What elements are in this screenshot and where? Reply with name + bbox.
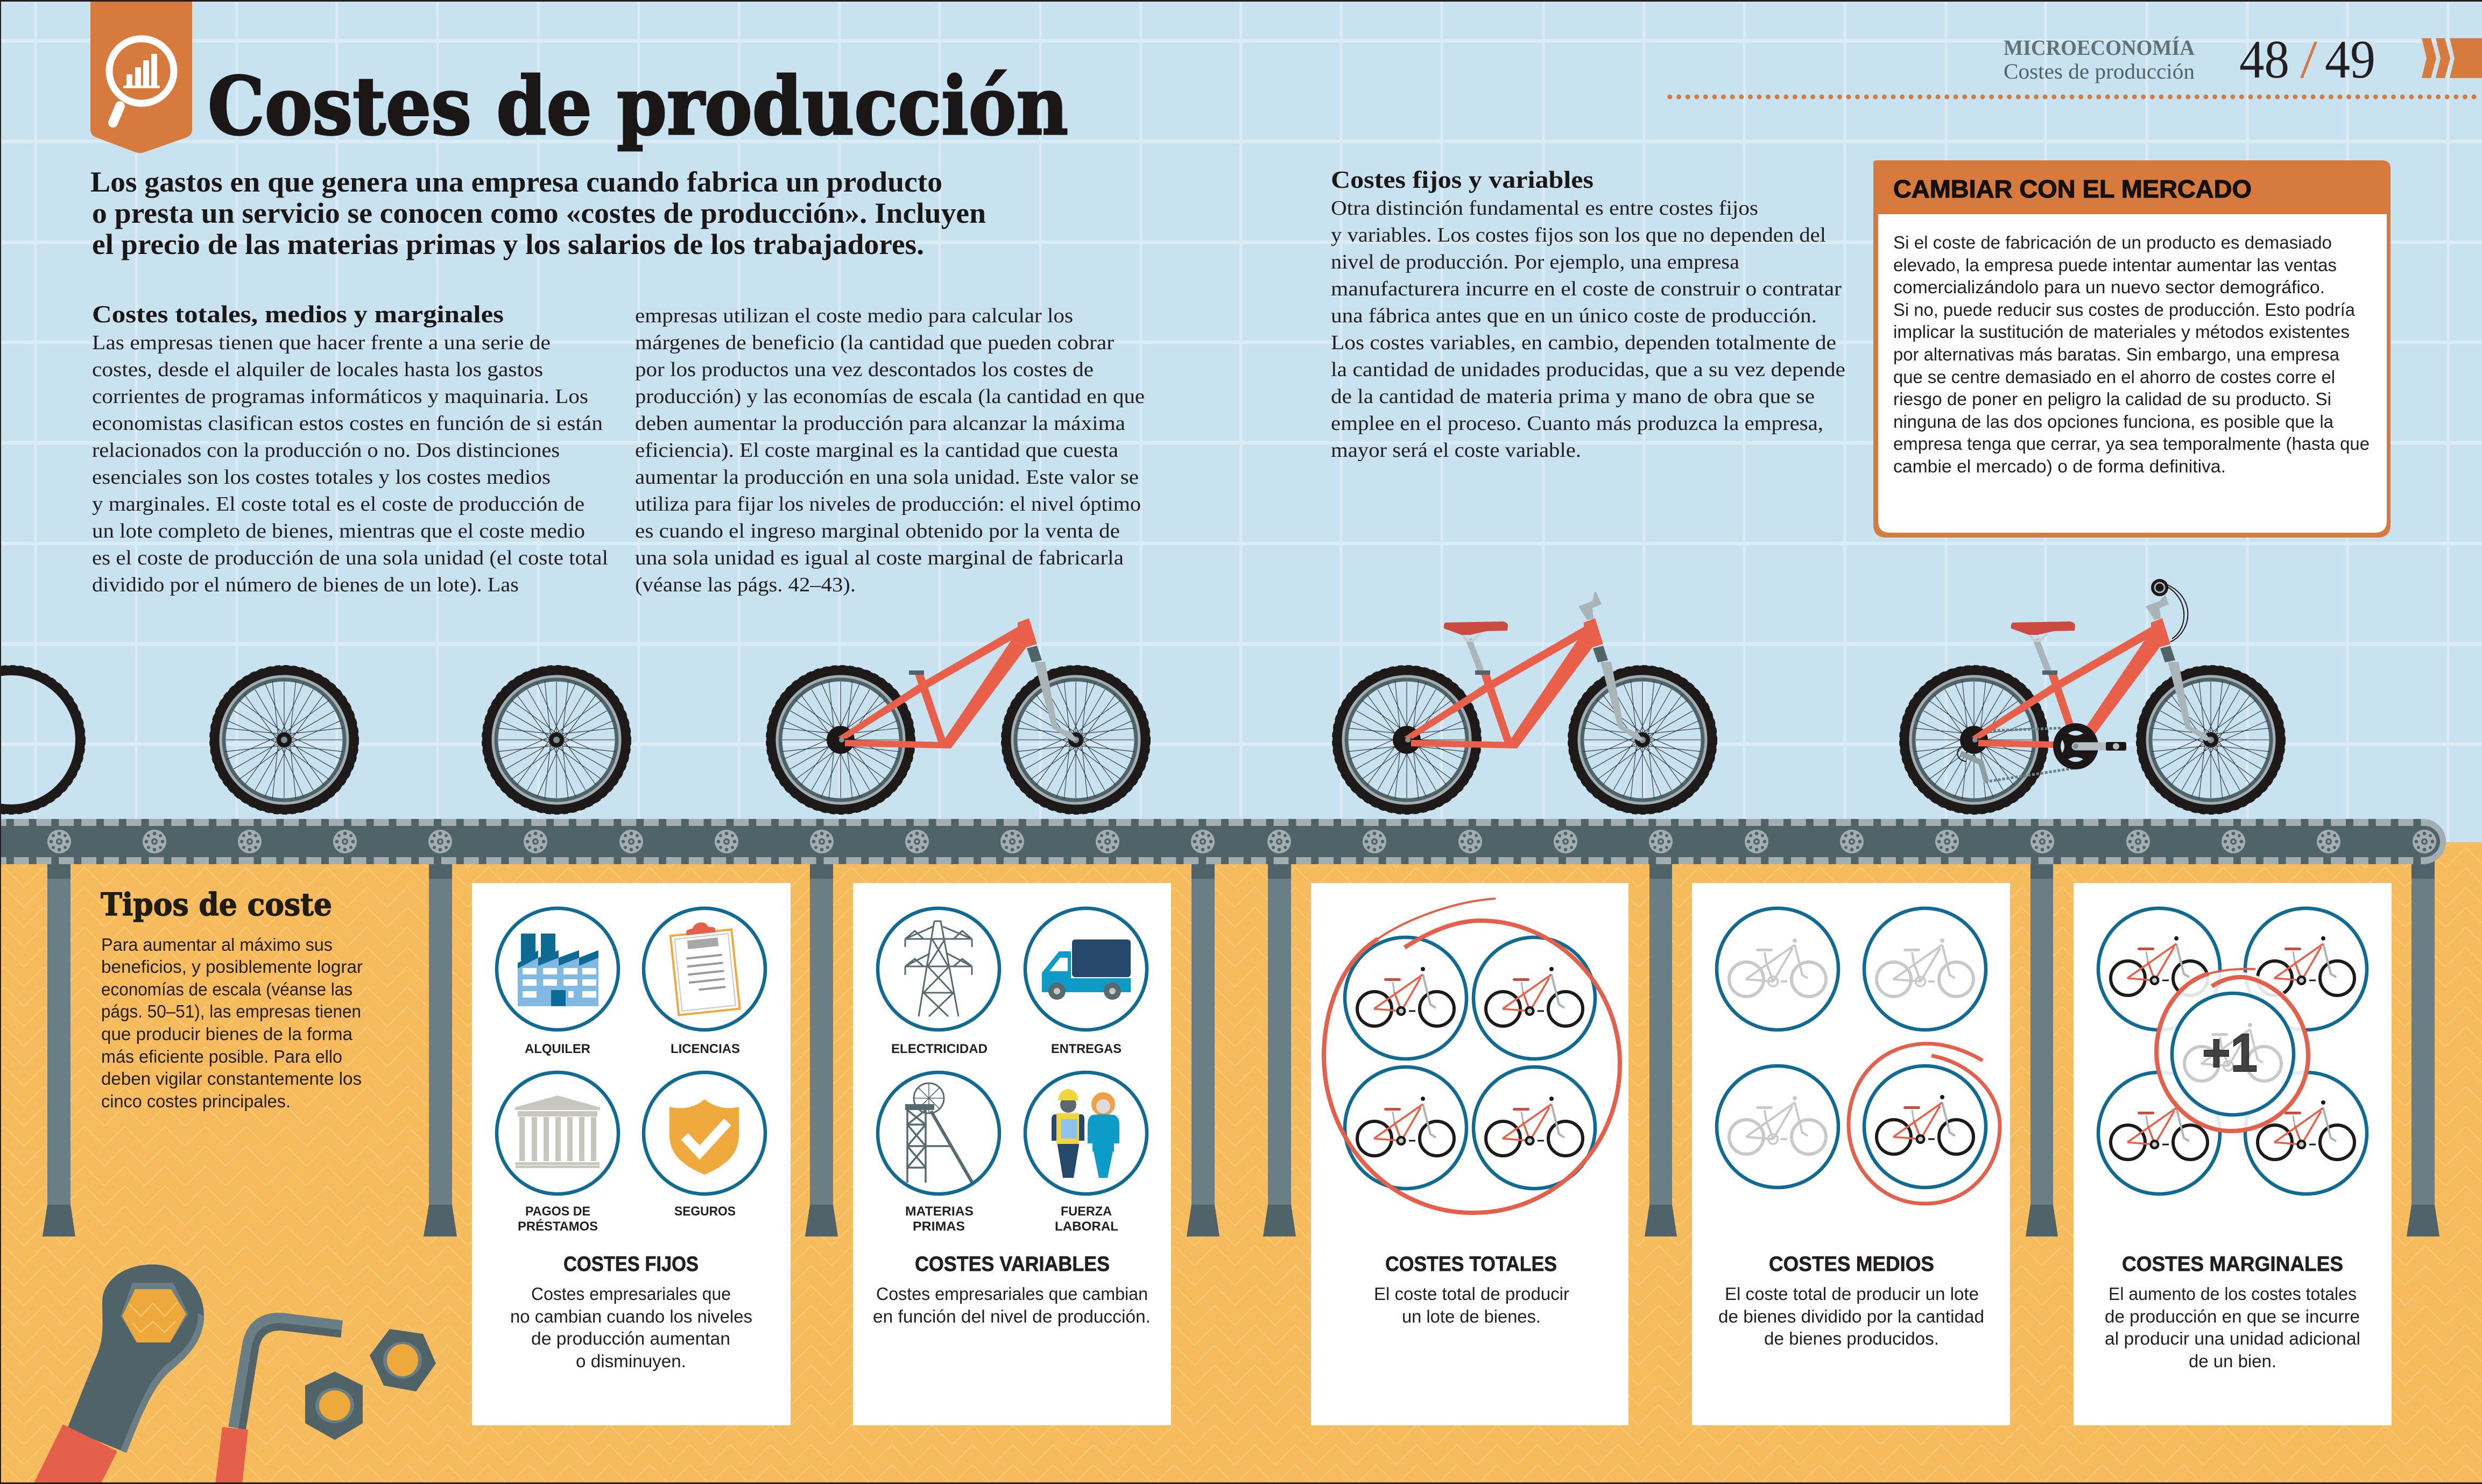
additional unit circled with +1: +1 bbox=[2202, 1023, 2258, 1083]
panel: costes fijos bbox=[472, 883, 791, 1425]
body text column 1: economistas clasifican estos costes en función de si están bbox=[92, 412, 603, 435]
body text column 2: una sola unidad es igual al coste marginal de fabricarla bbox=[635, 547, 1124, 569]
body text column 3 bbox=[1331, 197, 1845, 462]
icon labels: ELECTRICIDAD bbox=[891, 1042, 988, 1056]
icon labels: PAGOS DE bbox=[525, 1204, 590, 1219]
callout text: que se centre demasiado en el ahorro de costes corre el bbox=[1893, 367, 2335, 387]
card text bbox=[1374, 1284, 1569, 1326]
panel: costes medios bbox=[1692, 883, 2010, 1425]
card heading: COSTES VARIABLES bbox=[915, 1253, 1110, 1276]
card text: Costes empresariales que bbox=[531, 1284, 731, 1304]
icon labels: ENTREGAS bbox=[1051, 1042, 1122, 1056]
icon labels bbox=[891, 1042, 1122, 1234]
heading: tipos de coste: Tipos de coste bbox=[101, 886, 332, 923]
callout text: por alternativas más baratas. Sin embargo, una empresa bbox=[1893, 344, 2340, 364]
body text column 1 bbox=[92, 331, 608, 596]
body text column 1: un lote completo de bienes, mientras que el coste medio bbox=[92, 520, 585, 542]
card text: no cambian cuando los niveles bbox=[510, 1306, 752, 1326]
intro text: Los gastos en que genera una empresa cuando fabrica un producto bbox=[90, 166, 942, 198]
card text: El coste total de producir un lote bbox=[1725, 1284, 1979, 1304]
icon labels: LABORAL bbox=[1055, 1219, 1118, 1234]
dotted rule bbox=[1670, 95, 2476, 99]
background: orange chevron floor bbox=[0, 842, 2482, 1484]
body text column 3: manufacturera incurre en el coste de construir o contratar bbox=[1331, 278, 1842, 300]
page numbers: 49 bbox=[2325, 29, 2375, 89]
body text column 2: producción) y las economías de escala (la cantidad en que bbox=[635, 385, 1145, 408]
page numbers: 48 bbox=[2239, 29, 2289, 89]
body text column 3: emplee en el proceso. Cuanto más produzca la empresa, bbox=[1331, 412, 1823, 435]
running header: section: Costes de producción bbox=[2004, 59, 2195, 83]
bike: frame stage bbox=[767, 618, 1149, 813]
gray bikes and highlighted bike bbox=[1717, 908, 1986, 1188]
conveyor belt bbox=[0, 819, 2446, 864]
icon: hex key bbox=[215, 1322, 342, 1484]
body text column 1: costes, desde el alquiler de locales hasta los gastos bbox=[92, 358, 543, 381]
icon: electricity pylon bbox=[878, 908, 999, 1030]
callout text: riesgo de poner en peligro la calidad de su producto. Si bbox=[1893, 389, 2331, 409]
icon: mine headframe bbox=[878, 1072, 999, 1194]
body text column 1: es el coste de producción de una sola unidad (el coste total bbox=[92, 547, 608, 569]
intro text: el precio de las materias primas y los salarios de los trabajadores. bbox=[92, 228, 924, 260]
text: tipos de coste: que producir bienes de la forma bbox=[101, 1024, 353, 1044]
card heading: COSTES MEDIOS bbox=[1769, 1253, 1934, 1276]
page numbers bbox=[2239, 29, 2375, 89]
icon labels: ALQUILER bbox=[525, 1042, 590, 1056]
additional unit circled with +1 bbox=[2156, 969, 2308, 1131]
icon: wrench bbox=[33, 1264, 204, 1484]
callout text: empresa tenga que cerrar, ya sea temporalmente (hasta que bbox=[1893, 434, 2370, 454]
callout text: comercializándolo para un nuevo sector demográfico. bbox=[1893, 277, 2325, 297]
intro text: o presta un servicio se conocen como «costes de producción». Incluyen bbox=[92, 197, 986, 229]
body text column 2: empresas utilizan el coste medio para calcular los bbox=[635, 305, 1073, 327]
card text: al producir una unidad adicional bbox=[2105, 1328, 2360, 1348]
body text column 3: de la cantidad de materia prima y mano de obra que se bbox=[1331, 385, 1815, 408]
icon labels: PRIMAS bbox=[913, 1219, 965, 1234]
red hand-drawn circle bbox=[1324, 899, 1620, 1213]
panel: costes marginales bbox=[2074, 883, 2392, 1425]
text: tipos de coste: economías de escala (véanse las bbox=[101, 979, 352, 999]
body text column 2: (véanse las págs. 42–43). bbox=[635, 574, 856, 596]
icon: clipboard bbox=[644, 908, 765, 1030]
callout text: ninguna de las dos opciones funciona, es posible que la bbox=[1893, 412, 2334, 432]
text: tipos de coste: beneficios, y posiblemente lograr bbox=[101, 957, 363, 977]
body text column 3: una fábrica antes que en un único coste de producción. bbox=[1331, 305, 1817, 327]
card text bbox=[873, 1284, 1151, 1326]
wheel 2 bbox=[211, 667, 357, 813]
heading: costes totales, medios y marginales: Costes totales, medios y marginales bbox=[92, 301, 504, 328]
body text column 1: Las empresas tienen que hacer frente a una serie de bbox=[92, 331, 551, 354]
icon labels: SEGUROS bbox=[674, 1204, 736, 1219]
card text: de producción en que se incurre bbox=[2105, 1306, 2360, 1326]
callout text: Si el coste de fabricación de un producto es demasiado bbox=[1893, 232, 2332, 252]
callout text: elevado, la empresa puede intentar aumentar las ventas bbox=[1893, 255, 2337, 275]
bike: seat and stem stage bbox=[1334, 592, 1716, 813]
body text column 1: relacionados con la producción o no. Dos distinciones bbox=[92, 439, 560, 462]
body text column 1: esenciales son los costes totales y los costes medios bbox=[92, 466, 551, 489]
body text column 3: y variables. Los costes fijos son los que no dependen del bbox=[1331, 224, 1826, 246]
running header: section bbox=[2004, 36, 2195, 83]
text: tipos de coste: págs. 50–51), las empresas tienen bbox=[101, 1001, 361, 1021]
icon: factory bbox=[497, 908, 618, 1030]
icon labels: LICENCIAS bbox=[671, 1042, 740, 1056]
icon labels: FUERZA bbox=[1061, 1204, 1112, 1219]
text: tipos de coste: cinco costes principales. bbox=[101, 1091, 291, 1111]
callout text bbox=[1893, 232, 2370, 476]
icon: bank bbox=[497, 1072, 618, 1194]
four bikes bbox=[2098, 908, 2367, 1194]
card text bbox=[2105, 1284, 2360, 1371]
heading: costes fijos y variables: Costes fijos y variables bbox=[1331, 166, 1593, 193]
card heading: COSTES FIJOS bbox=[563, 1253, 699, 1276]
body text column 2: aumentar la producción en una sola unidad. Este valor se bbox=[635, 466, 1139, 489]
panel: costes totales bbox=[1311, 883, 1628, 1425]
card text: de bienes dividido por la cantidad bbox=[1718, 1306, 1984, 1326]
body text column 2: eficiencia). El coste marginal es la cantidad que cuesta bbox=[635, 439, 1118, 462]
bike: complete bbox=[1901, 579, 2284, 813]
body text column 2: márgenes de beneficio (la cantidad que pueden cobrar bbox=[635, 331, 1114, 354]
intro text bbox=[90, 166, 986, 260]
red hand-drawn circle bbox=[1849, 1044, 2000, 1204]
body text column 3: nivel de producción. Por ejemplo, una empresa bbox=[1331, 251, 1739, 273]
card text: Costes empresariales que cambian bbox=[876, 1284, 1148, 1304]
body text column 2: por los productos una vez descontados los costes de bbox=[635, 358, 1094, 381]
card text bbox=[1718, 1284, 1984, 1348]
callout text: Si no, puede reducir sus costes de producción. Esto podría bbox=[1893, 300, 2356, 320]
body text column 2: es cuando el ingreso marginal obtenido por la venta de bbox=[635, 520, 1120, 542]
body text column 2: utiliza para fijar los niveles de producción: el nivel óptimo bbox=[635, 493, 1141, 515]
card heading: COSTES TOTALES bbox=[1385, 1253, 1557, 1276]
panel: cambiar con el mercado bbox=[1873, 160, 2391, 538]
card text: El aumento de los costes totales bbox=[2109, 1284, 2357, 1304]
tyre on conveyor, cropped bbox=[0, 667, 84, 813]
conveyor legs bbox=[43, 861, 2439, 1236]
icon: shield bbox=[644, 1072, 765, 1194]
card text: de bienes producidos. bbox=[1764, 1328, 1939, 1348]
card heading: COSTES MARGINALES bbox=[2122, 1253, 2343, 1276]
text: tipos de coste: más eficiente posible. Para ello bbox=[101, 1047, 342, 1066]
panel: costes variables bbox=[853, 883, 1171, 1425]
icon labels bbox=[518, 1042, 740, 1234]
body text column 3: Otra distinción fundamental es entre costes fijos bbox=[1331, 197, 1758, 220]
body text column 2 bbox=[635, 305, 1145, 596]
card text: de producción aumentan bbox=[531, 1328, 730, 1348]
text: tipos de coste bbox=[101, 935, 363, 1111]
icon labels: PRÉSTAMOS bbox=[518, 1219, 598, 1234]
background: blue tiled wall bbox=[0, 0, 2482, 915]
body text column 1: corrientes de programas informáticos y maquinaria. Los bbox=[92, 385, 588, 408]
icon: page chevrons bbox=[2422, 38, 2482, 78]
body text column 1: y marginales. El coste total es el coste de producción de bbox=[92, 493, 584, 515]
icon: nuts bbox=[305, 1329, 436, 1440]
running header: section: MICROECONOMÍA bbox=[2004, 36, 2195, 60]
title: Costes de producción bbox=[208, 59, 1068, 153]
card text: o disminuyen. bbox=[576, 1351, 686, 1371]
body text column 3: mayor será el coste variable. bbox=[1331, 439, 1581, 462]
icon: delivery truck bbox=[1025, 908, 1147, 1030]
body text column 1: dividido por el número de bienes de un lote). Las bbox=[92, 574, 519, 596]
card text bbox=[510, 1284, 752, 1371]
text: tipos de coste: deben vigilar constantemente los bbox=[101, 1069, 362, 1089]
card text: un lote de bienes. bbox=[1402, 1306, 1541, 1326]
text: tipos de coste: Para aumentar al máximo sus bbox=[101, 935, 333, 955]
card text: en función del nivel de producción. bbox=[873, 1306, 1151, 1326]
callout text: cambie el mercado) o de forma definitiva. bbox=[1893, 456, 2226, 476]
page numbers: / bbox=[2300, 29, 2318, 89]
card text: El coste total de producir bbox=[1374, 1284, 1569, 1304]
callout heading: CAMBIAR CON EL MERCADO bbox=[1893, 175, 2252, 203]
body text column 3: Los costes variables, en cambio, dependen totalmente de bbox=[1331, 331, 1836, 354]
callout text: implicar la sustitución de materiales y métodos existentes bbox=[1893, 322, 2350, 342]
body text column 2: deben aumentar la producción para alcanzar la máxima bbox=[635, 412, 1125, 435]
banner with magnifying glass icon bbox=[90, 2, 192, 153]
belt gears bbox=[47, 830, 2436, 853]
icon: workers bbox=[1025, 1072, 1147, 1194]
wheel 3 bbox=[483, 667, 630, 813]
four bikes bbox=[1345, 937, 1595, 1189]
icon labels: MATERIAS bbox=[905, 1204, 974, 1219]
card text: de un bien. bbox=[2189, 1351, 2276, 1371]
body text column 3: la cantidad de unidades producidas, que a su vez depende bbox=[1331, 358, 1845, 381]
